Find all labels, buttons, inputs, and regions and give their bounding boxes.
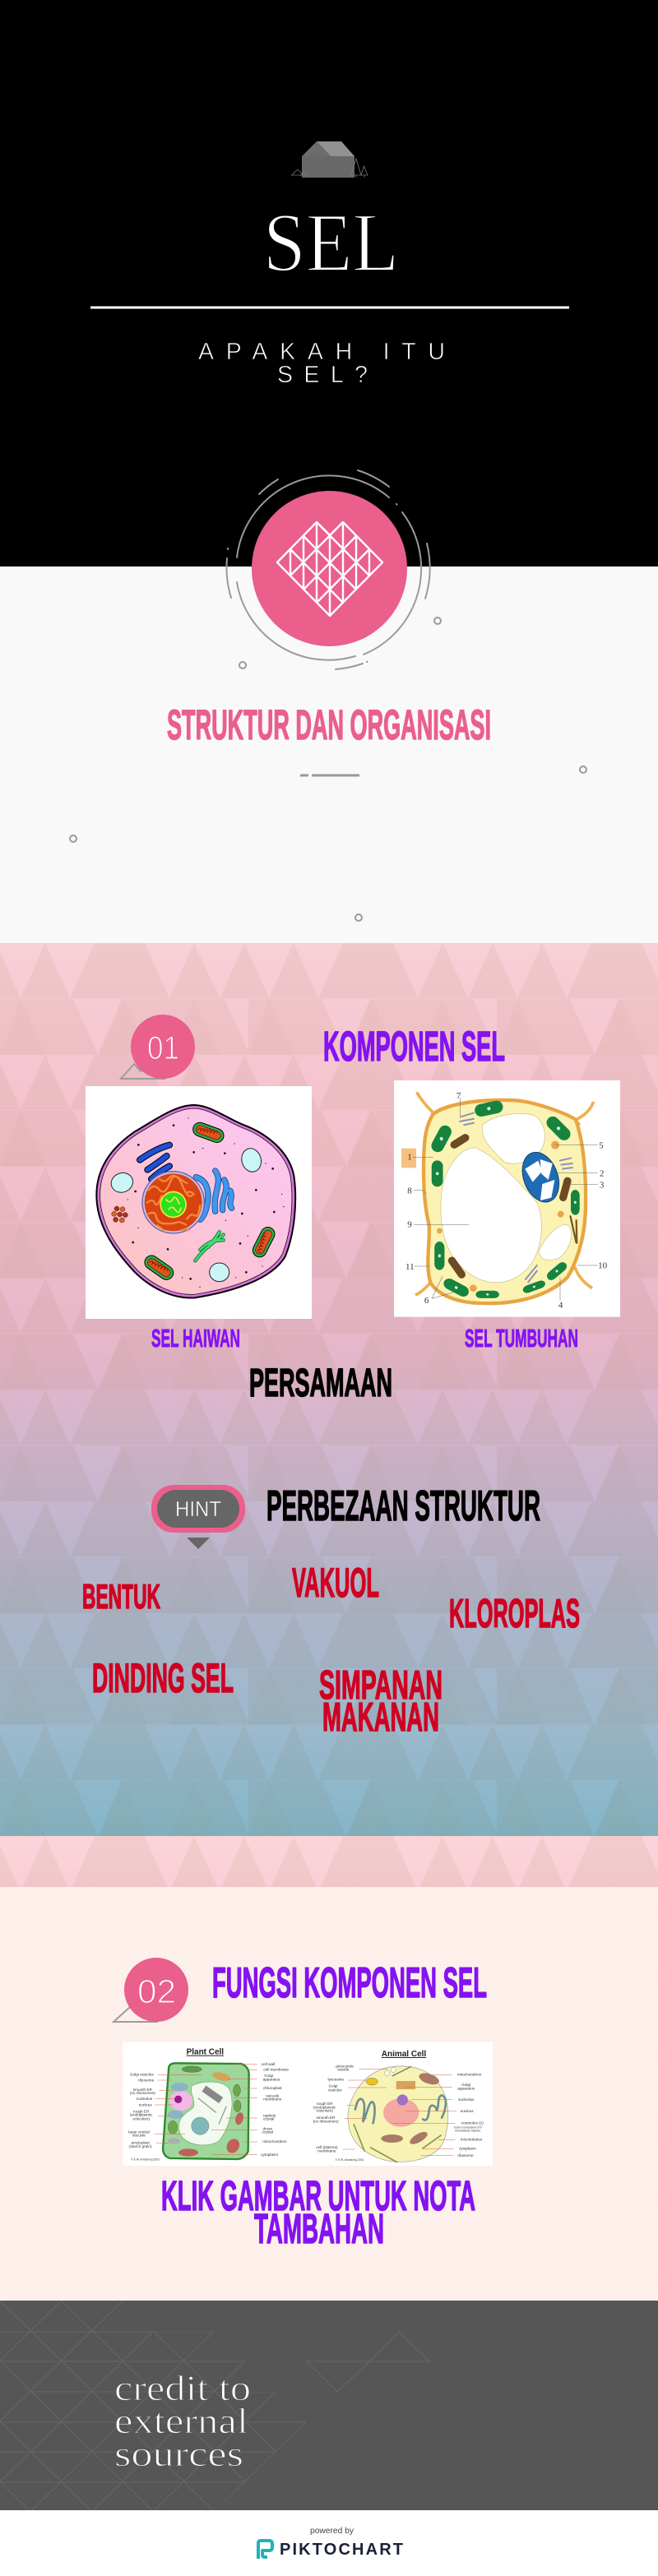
credit text: sources	[114, 2435, 243, 2474]
diagram labels: (endoplasmic	[313, 2105, 336, 2109]
diagram labels: pinocytotic	[336, 2064, 354, 2068]
diagram labels: Each composed of 9	[454, 2126, 482, 2130]
diagram labels: cell (plasma)	[316, 2145, 338, 2149]
diagram labels: rough ER	[133, 2109, 150, 2113]
illustration: plant cell	[394, 1080, 620, 1317]
illustration: plant cell: 2	[600, 1169, 604, 1179]
diagram labels: (no ribosomes)	[313, 2119, 339, 2123]
illustration: plant cell: 9	[407, 1220, 412, 1230]
diagram labels: lysosome	[327, 2078, 345, 2082]
diagram labels: mitochondrion	[262, 2139, 287, 2144]
diagram labels: microtubules	[461, 2137, 483, 2141]
diagram labels: vesicle	[337, 2068, 350, 2072]
illustration: plant cell: 11	[405, 1262, 415, 1272]
diagram labels: crystal	[263, 2117, 274, 2121]
number badge 02	[114, 1958, 188, 2022]
diagram labels: amyloplast	[132, 2140, 150, 2144]
diagram labels: membrane	[263, 2097, 282, 2101]
illustration: plant and animal cell diagram	[123, 2042, 493, 2166]
diagram labels: © E.W. Armstrong 2001	[131, 2158, 160, 2162]
diagram labels: cell wall	[262, 2062, 275, 2066]
number badge 01	[121, 1015, 195, 1079]
illustration: plant cell: 5	[599, 1141, 604, 1151]
diagram labels: ribosome	[457, 2153, 474, 2157]
label: vakuol: VAKUOL	[292, 1560, 379, 1606]
diagram labels: chloroplast	[263, 2086, 282, 2090]
hint badge: HINT	[175, 1496, 221, 1521]
number badge 01: 01	[147, 1030, 179, 1066]
diagram labels: nucleolus	[458, 2097, 475, 2102]
diagram labels: nucleus	[139, 2102, 152, 2107]
diagram labels: smooth ER	[316, 2116, 336, 2120]
diagram labels: (starch grain)	[129, 2144, 152, 2148]
title divider	[90, 306, 569, 309]
illustration: plant cell: 7	[456, 1091, 461, 1101]
diagram labels: reticulum)	[316, 2109, 333, 2113]
label: simpanan makanan	[319, 1663, 443, 1740]
footer: piktochart logo: PIKTOCHART	[280, 2541, 403, 2559]
label: bentuk: BENTUK	[82, 1577, 160, 1616]
diagram labels: apparatus	[457, 2087, 475, 2091]
triangle line pattern	[0, 2301, 430, 2510]
diagram labels: (no ribosomes)	[130, 2091, 155, 2095]
diagram labels: Golgi	[461, 2083, 470, 2087]
illustration: plant cell: 6	[424, 1296, 429, 1306]
call to action text	[161, 2172, 475, 2252]
illustration: plant cell: 10	[598, 1261, 608, 1271]
icon: house	[291, 141, 368, 178]
label: sel haiwan: SEL HAIWAN	[151, 1324, 240, 1353]
diagram labels: nucleus	[461, 2109, 474, 2113]
illustration: plant cell: 8	[407, 1186, 412, 1196]
subtitle	[198, 339, 445, 388]
diagram labels: druse	[263, 2126, 273, 2130]
illustration: plant and animal cell diagram: Animal Cell	[382, 2050, 426, 2059]
heading underline	[300, 775, 359, 776]
diagram labels: centrioles (2)	[461, 2121, 484, 2125]
label: simpanan makanan: MAKANAN	[322, 1695, 439, 1740]
panel: pink band	[0, 1836, 658, 1887]
diagram labels: © E.W. Armstrong 2001	[336, 2158, 364, 2162]
panel: credit section	[0, 2301, 658, 2510]
diagram labels: smooth ER	[133, 2088, 152, 2092]
diagram labels: Golgi	[329, 2084, 337, 2088]
diagram labels: (endoplasmic	[130, 2113, 153, 2117]
diagram labels: vacuole	[266, 2093, 280, 2097]
diagram labels: vacuole	[132, 2134, 146, 2138]
diagram labels: nucleolus	[136, 2097, 153, 2101]
diagram labels: cytoplasm	[261, 2153, 278, 2157]
icon: pink circle with rings	[226, 470, 430, 669]
diagram labels: microtubule triplets.	[455, 2130, 481, 2133]
heading: persamaan: PERSAMAAN	[249, 1362, 392, 1405]
hint badge	[151, 1485, 245, 1549]
decorative circles	[70, 617, 586, 921]
animal cell drawing	[348, 2066, 448, 2162]
diagram labels: ribosome	[138, 2078, 155, 2082]
title: SEL	[263, 197, 399, 289]
subtitle: APAKAH ITU	[198, 339, 445, 365]
credit text: credit to	[114, 2370, 251, 2408]
diagram labels: rough ER	[317, 2102, 333, 2106]
illustration: plant cell: 4	[558, 1300, 563, 1310]
illustration: animal cell	[86, 1086, 312, 1319]
call to action text: TAMBAHAN	[254, 2205, 384, 2252]
diagram labels: Golgi vesicles	[130, 2073, 154, 2077]
diagram labels: Golgi	[264, 2074, 273, 2078]
credit text: external	[114, 2403, 248, 2441]
diagram labels: raphide	[263, 2114, 276, 2118]
plant cell drawing	[163, 2063, 249, 2159]
diagram labels: crystal	[262, 2130, 273, 2134]
subtitle: SEL?	[277, 362, 368, 388]
diagram labels: vesicles	[328, 2088, 342, 2092]
label: dinding sel: DINDING SEL	[92, 1655, 234, 1701]
diagram labels: apparatus	[263, 2077, 280, 2081]
icon: lattice heart	[277, 522, 382, 616]
diagram labels: cell membrane	[263, 2068, 289, 2072]
panel: light section	[0, 567, 658, 944]
diagram labels: mitochondrion	[457, 2072, 482, 2076]
credit text	[114, 2370, 251, 2474]
panel: cream section	[0, 1887, 658, 2301]
diagram labels	[128, 2062, 484, 2162]
panel: triangle pattern gradient	[0, 943, 658, 1836]
diagram labels: cytoplasm	[459, 2147, 476, 2151]
panel: black header	[0, 0, 658, 567]
label: simpanan makanan: SIMPANAN	[319, 1663, 443, 1708]
illustration: plant cell: 1	[407, 1153, 412, 1163]
heading: komponen sel: KOMPONEN SEL	[323, 1023, 505, 1070]
illustration: plant cell: 3	[600, 1180, 605, 1190]
diagram labels: reticulum)	[132, 2116, 150, 2120]
illustration: plant and animal cell diagram: Plant Cell	[187, 2048, 224, 2057]
diagram labels: membrane	[317, 2148, 336, 2153]
diagram labels: large central	[128, 2130, 150, 2134]
number badge 02: 02	[137, 1972, 176, 2010]
footer: powered by: powered by	[310, 2526, 354, 2536]
